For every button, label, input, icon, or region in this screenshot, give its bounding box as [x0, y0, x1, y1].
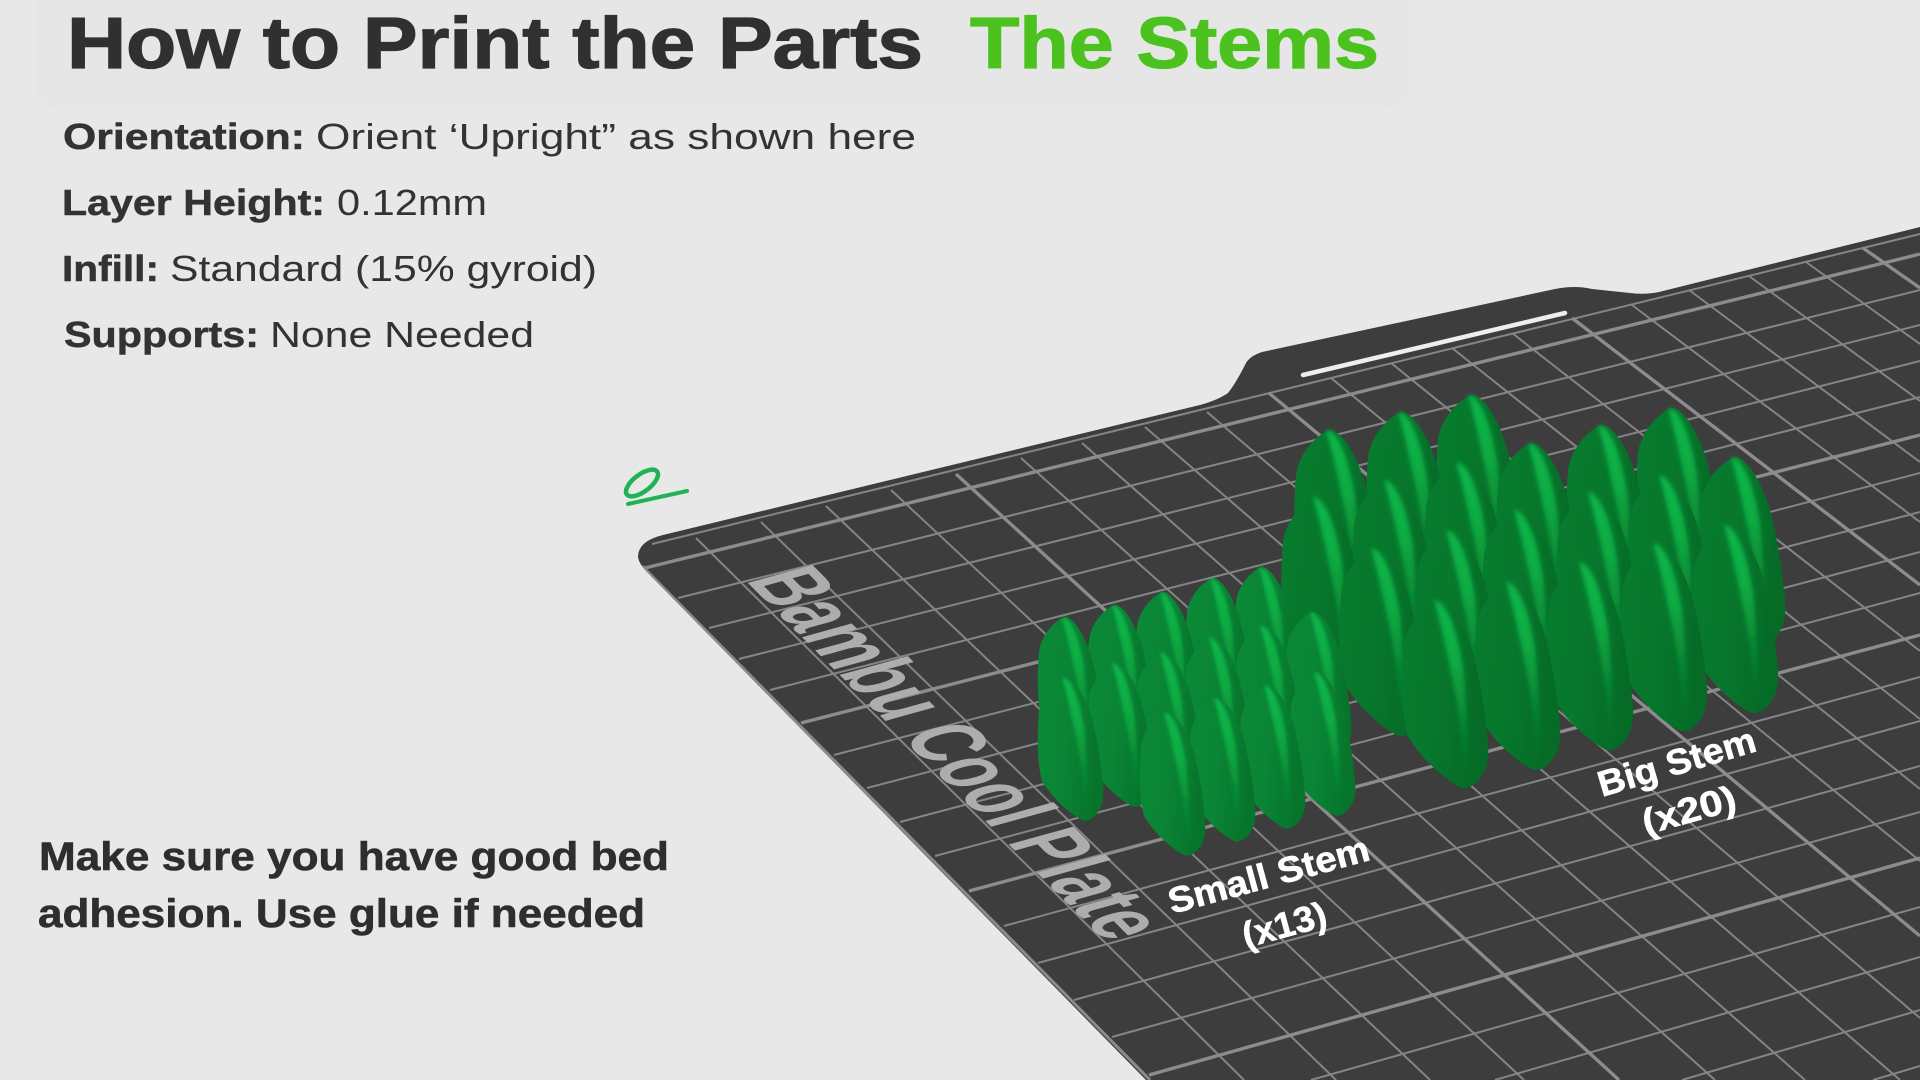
setting: orientation: Orientation: — [63, 116, 305, 157]
setting: supports: Supports: — [64, 314, 259, 355]
title: How to Print the Parts — [67, 4, 923, 84]
panel: build plate — [638, 227, 1920, 1080]
big stems group — [1281, 395, 1785, 788]
label: small stem: (x13) — [1237, 894, 1331, 956]
subtitle: The Stems: The Stems — [970, 4, 1379, 84]
note: bed adhesion: adhesion. Use glue if needed — [38, 892, 645, 936]
setting: supports: None Needed — [270, 314, 534, 355]
note: bed adhesion: Make sure you have good bed — [39, 835, 669, 879]
small stems group — [1038, 567, 1355, 856]
setting: infill: Standard (15% gyroid) — [170, 248, 597, 289]
plate name: Bambu Cool Plate — [724, 557, 1190, 949]
setting: layer height — [62, 182, 487, 223]
label: big stem — [1593, 719, 1761, 843]
setting: supports — [64, 314, 534, 355]
label: small stem: Small Stem — [1163, 828, 1374, 922]
label: big stem: Big Stem — [1593, 719, 1761, 805]
note: bed adhesion — [38, 835, 669, 936]
setting: layer height: Layer Height: — [62, 182, 325, 223]
plate grid — [642, 234, 1920, 1080]
label: big stem: (x20) — [1637, 777, 1741, 843]
label: small stem — [1163, 828, 1374, 956]
plate handle slot — [1303, 313, 1565, 375]
setting: layer height: 0.12mm — [337, 182, 487, 223]
setting: infill — [62, 248, 597, 289]
title backdrop — [35, 0, 1410, 110]
setting: orientation — [63, 116, 916, 157]
setting: orientation: Orient ‘Upright” as shown here — [316, 116, 916, 157]
plate surface — [638, 227, 1920, 1080]
icon: small green mark — [622, 465, 687, 504]
setting: infill: Infill: — [62, 248, 159, 289]
